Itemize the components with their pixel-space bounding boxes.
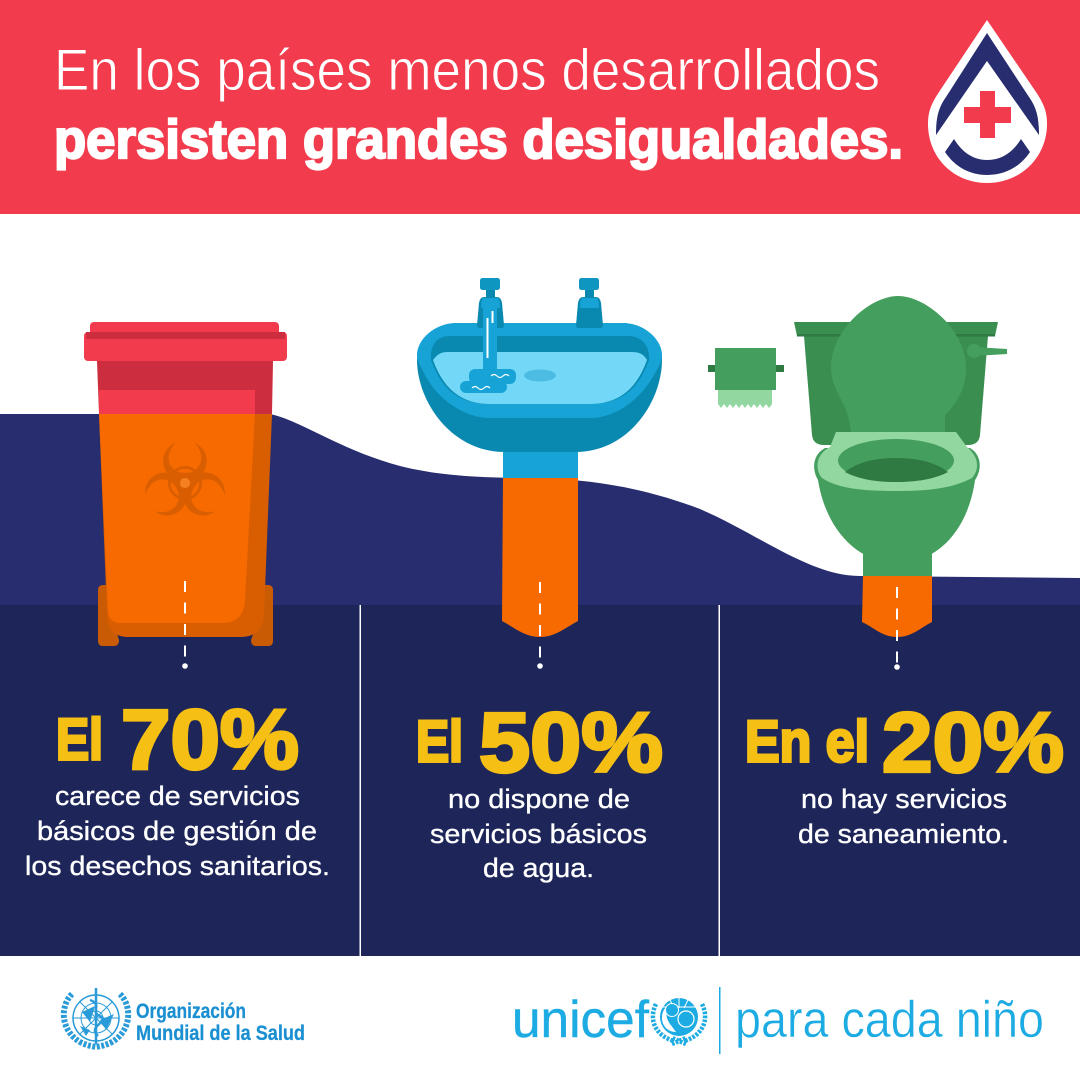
logo: unicef emblem: [653, 998, 705, 1044]
icon: biohazard symbol: [139, 443, 231, 522]
text: waste services: carece de servicios: [55, 781, 300, 811]
text: Organización Mundial de la Salud: Mundial de la Salud: [136, 1022, 305, 1045]
text: waste services: los desechos sanitarios.: [25, 851, 330, 881]
icon: waste bin: [84, 322, 287, 646]
logo: WHO emblem: [64, 988, 128, 1047]
text: water services: servicios básicos: [430, 819, 647, 849]
statistic: 70%: 70%: [121, 692, 299, 786]
text: water services: de agua.: [483, 853, 594, 883]
statistic: 50%: [416, 696, 663, 790]
statistic: 50%: 50%: [479, 696, 663, 790]
toilet tank: [794, 322, 1007, 445]
right tap: [576, 278, 603, 328]
statistic: 70%: [56, 692, 299, 786]
basin: [417, 323, 662, 452]
title: [54, 38, 903, 170]
dark statistics band: [0, 605, 1080, 956]
toilet bowl: [814, 448, 980, 563]
column divider right: [718, 605, 720, 956]
header banner: [0, 0, 1080, 214]
text: water services: no dispone de: [448, 784, 630, 814]
text: para cada niño: para cada niño: [735, 991, 1044, 1049]
statistic: 70%: El: [56, 708, 103, 772]
column divider left: [360, 605, 361, 956]
text: sanitation services: no hay servicios: [801, 784, 1007, 814]
statistic: 20%: [745, 696, 1064, 790]
logo divider: [719, 987, 720, 1054]
dashed pointer: sink: [537, 582, 543, 669]
text: sanitation services: [798, 784, 1009, 849]
text: water services: [430, 784, 647, 883]
statistic: 20%: 20%: [882, 696, 1064, 790]
text: waste services: básicos de gestión de: [37, 816, 317, 846]
text: Organización Mundial de la Salud: Organización: [136, 1000, 246, 1023]
background wave: [0, 414, 1080, 606]
left tap: [477, 278, 504, 328]
text: sanitation services: de saneamiento.: [798, 819, 1009, 849]
running water: [460, 300, 516, 393]
title: En los países menos desarrollados: [54, 38, 880, 103]
toilet lid: [831, 296, 966, 436]
text: waste services: [25, 781, 330, 881]
title: persisten grandes desigualdades.: [54, 108, 903, 170]
dashed pointer: toilet: [894, 587, 900, 670]
icon: toilet paper roll: [708, 348, 784, 408]
text: Organización Mundial de la Salud: [136, 1000, 305, 1045]
icon: water drop logo with cross: [928, 20, 1047, 183]
statistic: 20%: En el: [745, 710, 869, 774]
logo: unicef wordmark: unicef: [512, 991, 650, 1049]
icon: sink: [417, 278, 662, 637]
icon: toilet: [794, 296, 1007, 637]
toilet base: [862, 545, 932, 637]
toilet seat: [817, 432, 977, 491]
sink pedestal: [502, 445, 578, 637]
statistic: 50%: El: [416, 710, 463, 774]
dashed pointer: bin: [182, 581, 188, 669]
